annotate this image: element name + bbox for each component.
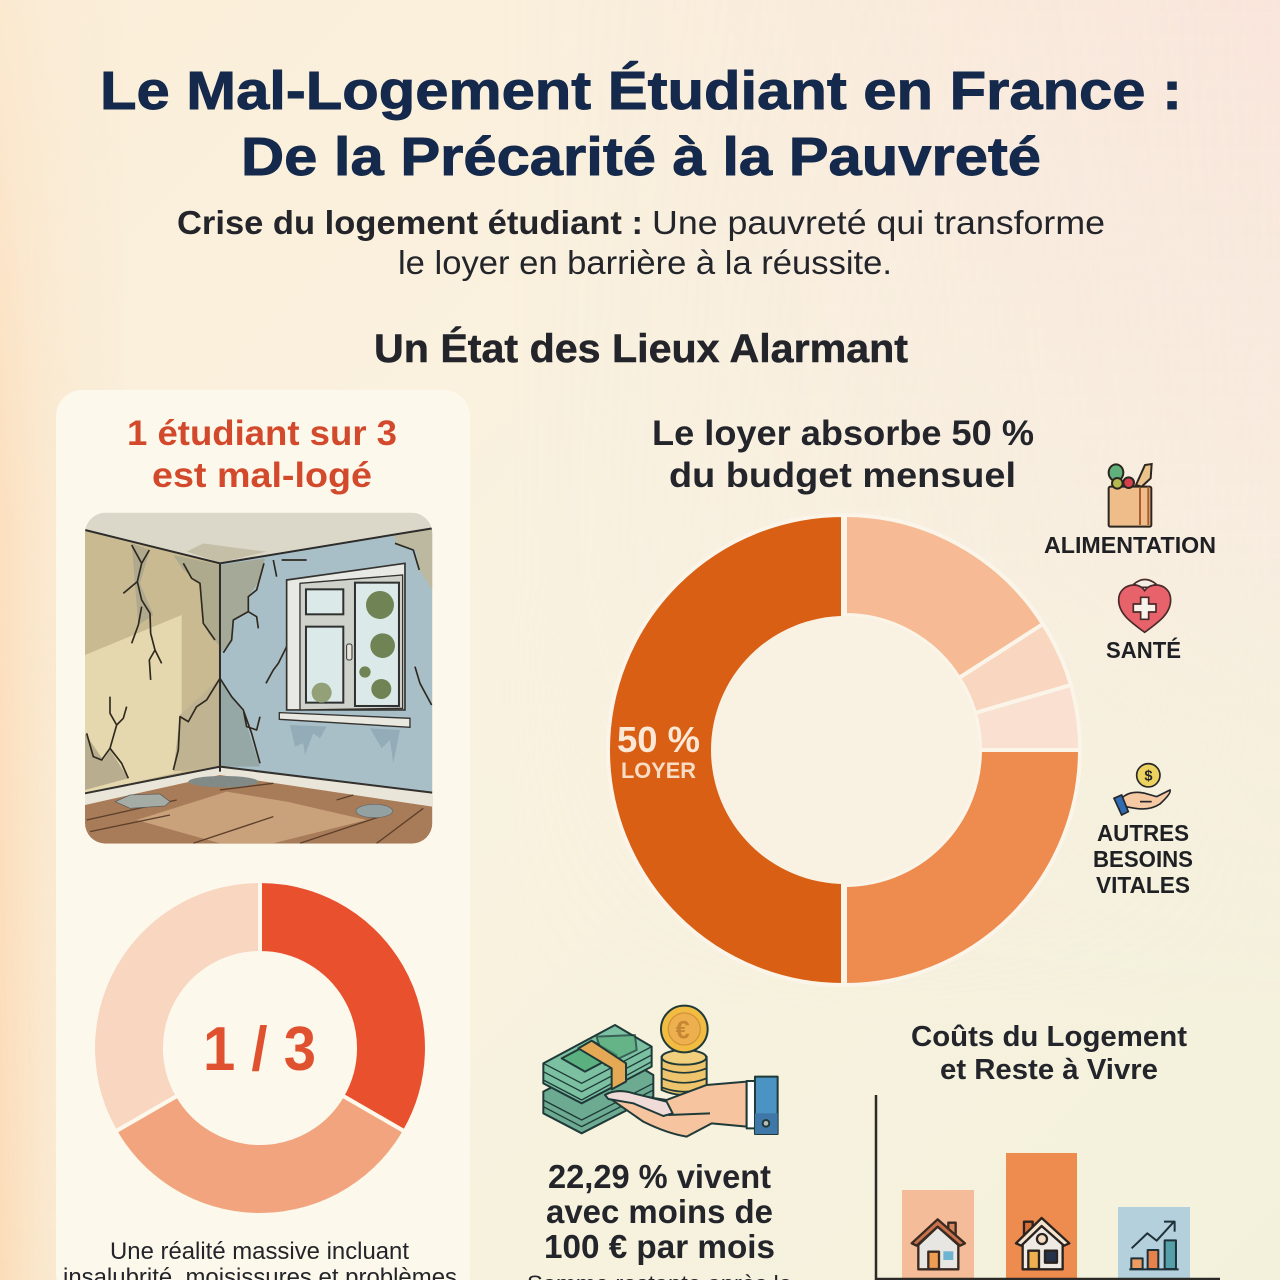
- donut chart: budget: [608, 515, 1080, 985]
- loyer label: LOYER: [621, 758, 696, 783]
- panel: reste à vivre: [527, 1006, 792, 1280]
- bar chart: [876, 1095, 1220, 1279]
- cracks: [87, 543, 432, 778]
- stat headline: 22,29 % vivent: [548, 1158, 771, 1195]
- icon: house one: [912, 1219, 965, 1269]
- label: autres besoins vitales: [1093, 820, 1193, 898]
- panel: 1 étudiant sur 3: [56, 390, 470, 1280]
- panel: coûts du logement: [876, 1021, 1220, 1279]
- subtitle: le loyer en barrière à la réussite.: [398, 244, 892, 281]
- label: autres besoins vitales: BESOINS: [1093, 846, 1193, 872]
- section heading: Un État des Lieux Alarmant: [374, 326, 908, 371]
- panel heading: [127, 414, 397, 495]
- icon: house two: [1016, 1218, 1069, 1269]
- panel caption: Une réalité massive incluant: [110, 1238, 409, 1265]
- illustration: damp room: [85, 513, 432, 844]
- panel: budget: [608, 414, 1216, 985]
- mould: [312, 591, 395, 703]
- donut centre label: 1 / 3: [203, 1015, 316, 1084]
- subtitle: [177, 204, 1105, 281]
- icon: hand with coin: $: [1144, 769, 1152, 785]
- chart heading: Coûts du Logement: [911, 1021, 1187, 1053]
- chart heading: et Reste à Vivre: [940, 1054, 1158, 1086]
- label: autres besoins vitales: AUTRES: [1097, 820, 1189, 846]
- loyer label: [617, 719, 700, 783]
- title: Le Mal-Logement Étudiant en France :: [100, 61, 1182, 121]
- icon: growth chart: [1129, 1222, 1179, 1269]
- subtitle: Crise du logement étudiant :: [177, 204, 643, 241]
- budget heading: [652, 414, 1034, 495]
- label: santé: SANTÉ: [1106, 636, 1181, 663]
- stat headline: [544, 1158, 775, 1265]
- label: alimentation: ALIMENTATION: [1044, 532, 1216, 558]
- title: [100, 61, 1182, 187]
- panel caption: [63, 1238, 457, 1280]
- budget heading: du budget mensuel: [669, 456, 1016, 495]
- icon: hand with coin: [1114, 764, 1170, 815]
- icon: grocery bag: [1109, 464, 1152, 527]
- icon: money, coins and hand: €: [676, 1017, 690, 1045]
- stat headline: avec moins de: [546, 1193, 773, 1230]
- donut chart: 1 sur 3: [93, 881, 427, 1215]
- icon: money, coins and hand: [543, 1006, 778, 1137]
- panel heading: 1 étudiant sur 3: [127, 414, 397, 453]
- window: [287, 563, 405, 710]
- drips: [290, 725, 400, 763]
- title: De la Précarité à la Pauvreté: [241, 127, 1041, 187]
- stat headline: 100 € par mois: [544, 1228, 775, 1265]
- budget heading: Le loyer absorbe 50 %: [652, 414, 1034, 453]
- icon: health heart: [1119, 579, 1171, 632]
- label: autres besoins vitales: VITALES: [1096, 872, 1190, 898]
- chart heading: [911, 1021, 1187, 1086]
- loyer label: 50 %: [617, 719, 700, 760]
- panel heading: est mal-logé: [152, 456, 372, 495]
- hole fill: [711, 616, 979, 884]
- subtitle: Une pauvreté qui transforme: [652, 204, 1105, 241]
